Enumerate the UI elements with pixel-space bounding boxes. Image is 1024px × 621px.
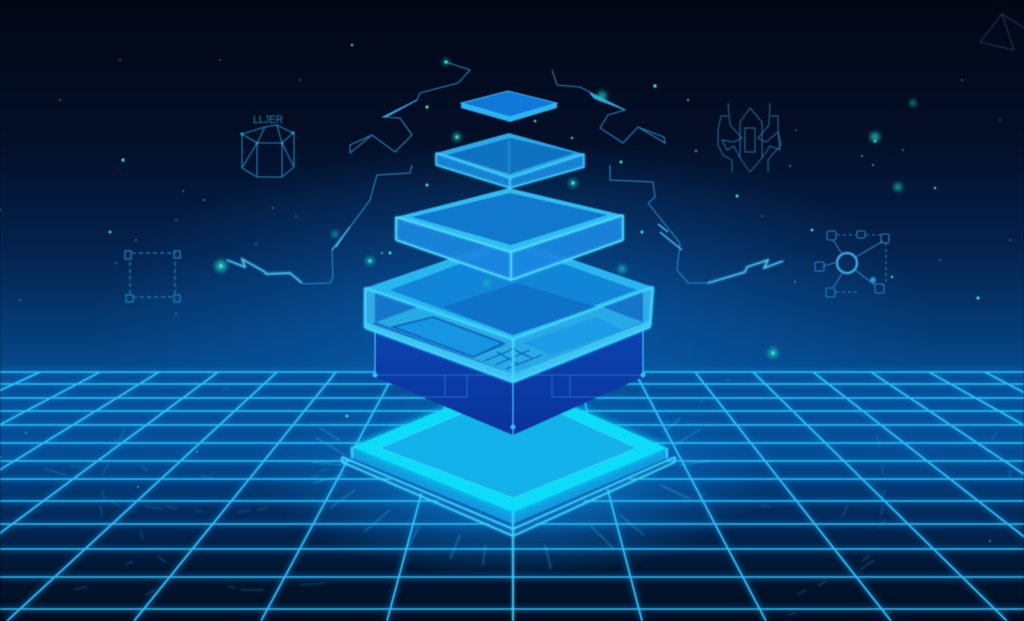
layer two sides: [436, 153, 584, 188]
base platform: [342, 380, 675, 621]
band edges: [365, 287, 653, 382]
icon: circuit emblem: [718, 103, 781, 172]
glowing particles: [215, 59, 916, 358]
perspective grid: [0, 372, 1024, 621]
horizontal grid lines: [0, 372, 1024, 609]
top layer: [461, 91, 557, 122]
circuit trace: lower right: [610, 165, 708, 283]
glass corner columns: [365, 288, 375, 328]
icon: network node diagram: [815, 231, 889, 297]
lightning bolt: right: [708, 260, 783, 283]
layer three inner top: [412, 193, 607, 245]
grid halo: [0, 372, 1024, 621]
layer two: [436, 133, 584, 188]
top layer sides: [461, 103, 557, 122]
background: floor: [0, 372, 1024, 621]
base lower plate: [342, 385, 675, 535]
tray panel right: [522, 317, 623, 355]
top right faint icon: [980, 14, 1024, 50]
base inner panel: [380, 392, 637, 498]
layer three sides: [396, 215, 623, 280]
layer three edges: [396, 215, 623, 280]
body details: [375, 375, 643, 397]
tray rim inside band: [376, 306, 513, 374]
glass band right: [513, 287, 653, 382]
circuit trace: lower left: [302, 165, 412, 284]
tray ribs: [473, 344, 542, 369]
main box: [365, 238, 653, 435]
glowing base top: [352, 380, 667, 512]
icon label: LLJER: [253, 114, 283, 126]
dark lower body: [372, 328, 645, 435]
lightning bolt: left: [227, 259, 302, 283]
layer two top rim: [436, 133, 584, 178]
darker patch on top: [443, 283, 597, 335]
circuit trace: upper left: [350, 62, 470, 153]
radial grid lines: [0, 372, 1024, 621]
bright star particles: [109, 44, 980, 418]
layer two edges: [436, 140, 584, 188]
floor debris streaks: [44, 380, 1010, 615]
base rim lines: [342, 447, 675, 621]
faint white dust: [0, 59, 1011, 542]
base side wall: [352, 447, 667, 524]
base radiating burst: [312, 418, 710, 569]
icon: wireframe layer prism: [240, 114, 295, 177]
tray panel left: [393, 317, 503, 357]
layer three: [396, 188, 623, 280]
glass band left: [365, 288, 513, 382]
layer two inner top: [447, 138, 575, 174]
lower glass rim: [366, 320, 650, 382]
box top rim: [365, 238, 653, 339]
joint dots: [372, 372, 646, 430]
top layer face: [461, 91, 557, 117]
icon: dashed selection square: [125, 251, 180, 302]
layer three top rim: [396, 188, 623, 252]
circuit trace: upper right: [552, 70, 665, 143]
box inner top: [390, 245, 637, 335]
